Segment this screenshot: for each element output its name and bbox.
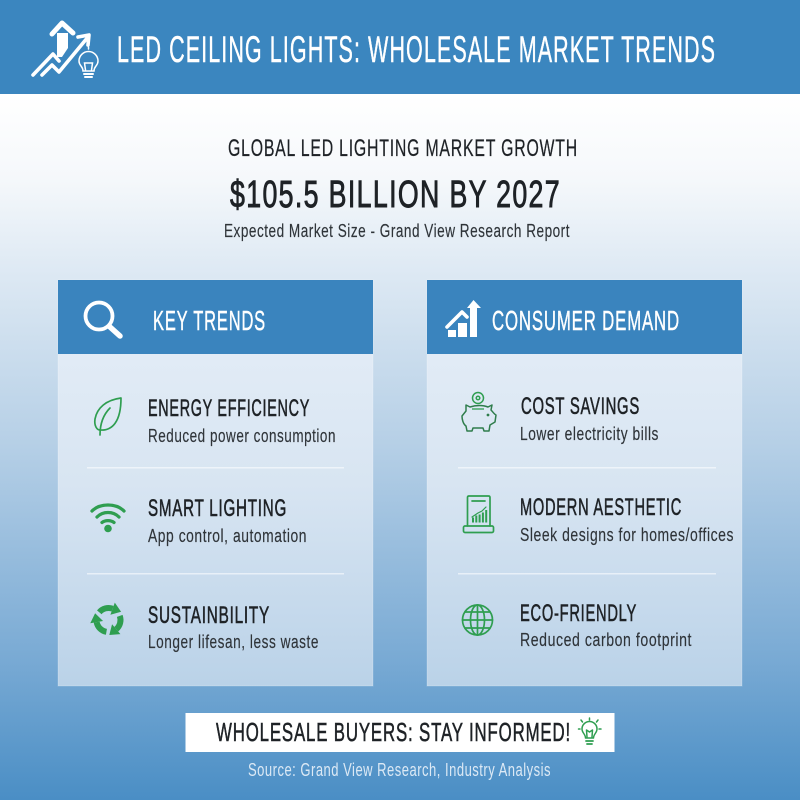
header banner (0, 0, 800, 94)
demand: cost savings: Lower electricity bills (520, 423, 659, 444)
icon: globe (462, 605, 492, 635)
trend: energy efficiency: Reduced power consumption (148, 425, 336, 446)
panel: key trends (58, 280, 373, 686)
icon: recycle (87, 603, 128, 640)
demand: cost savings (462, 392, 659, 444)
icon: green light bulb (578, 718, 601, 744)
icon: wifi (92, 505, 124, 532)
figure caption: Expected Market Size - Grand View Research Report (224, 220, 570, 241)
icon: tablet with chart (464, 496, 494, 532)
trend: sustainability: Longer lifesan, less waste (148, 631, 319, 652)
trend: sustainability (87, 602, 319, 652)
demand: eco-friendly: ECO-FRIENDLY (520, 600, 637, 627)
callout: stay informed: WHOLESALE BUYERS: STAY INFORMED! (216, 717, 571, 747)
callout: stay informed (186, 713, 614, 752)
icon: magnifying glass (86, 302, 120, 336)
icon: piggy bank (462, 392, 496, 431)
panel: consumer demand (427, 280, 742, 686)
demand: modern aesthetic (464, 494, 734, 545)
icon: leaf (95, 398, 121, 435)
source line: Source: Grand View Research, Industry Analysis (248, 759, 551, 780)
trend: energy efficiency (95, 395, 336, 446)
icon: rising arrows with light bulb (33, 23, 98, 77)
trend: sustainability: SUSTAINBILITY (148, 602, 270, 629)
trend: smart lighting: App control, automation (148, 525, 307, 546)
key figure: $105.5 BILLION BY 2027 (230, 174, 561, 216)
subheading: GLOBAL LED LIGHTING MARKET GROWTH (228, 135, 578, 162)
trend: energy efficiency: ENERGY EFFICIENCY (148, 395, 310, 422)
market growth summary (224, 135, 578, 241)
demand: modern aesthetic: Sleek designs for homes/offices (520, 524, 734, 545)
trend: smart lighting: SMART LIGHTING (148, 495, 287, 522)
icon: growth chart with arrow (447, 300, 481, 337)
panel heading: CONSUMER DEMAND (492, 305, 680, 336)
demand: eco-friendly: Reduced carbon footprint (520, 629, 692, 650)
demand: cost savings: COST SAVINGS (521, 393, 640, 420)
demand: modern aesthetic: MODERN AESTHETIC (520, 494, 682, 521)
panel heading: KEY TRENDS (153, 305, 266, 336)
demand: eco-friendly (462, 600, 692, 650)
trend: smart lighting (92, 495, 307, 546)
